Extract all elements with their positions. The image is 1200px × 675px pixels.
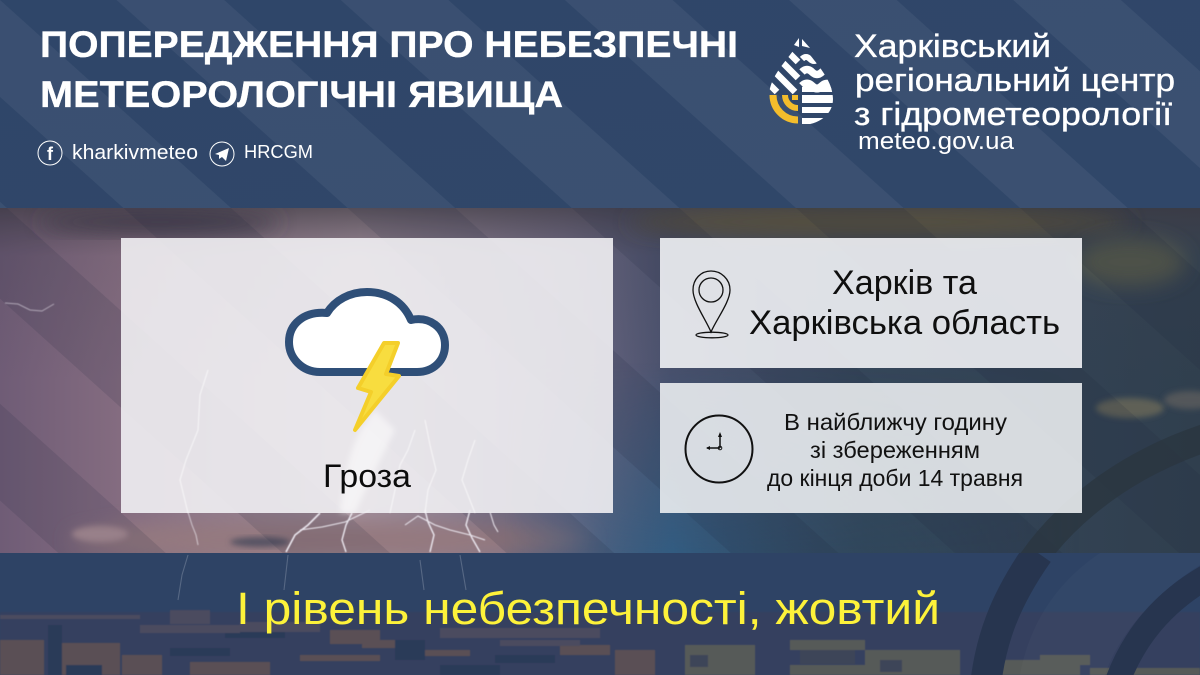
facebook handle: kharkivmeteo [72, 142, 198, 164]
title: ПОПЕРЕДЖЕННЯ ПРО НЕБЕЗПЕЧНІ [40, 24, 738, 65]
location text: Харків та [832, 264, 977, 302]
background photo: storm sky with lightning [0, 206, 1200, 560]
icon: telegram [210, 142, 234, 166]
danger level: І рівень небезпечності, жовтий [236, 583, 940, 634]
panel: location [660, 238, 1082, 368]
icon: clock [686, 416, 752, 482]
lower-right arcs [1021, 425, 1200, 553]
title: МЕТЕОРОЛОГІЧНІ ЯВИЩА [40, 74, 563, 115]
icon: cloud with lightning [289, 292, 445, 430]
panel: time [660, 383, 1082, 513]
time text: зі збереженням [810, 437, 980, 463]
location text: Харківська область [749, 304, 1060, 342]
icon: facebook: f [47, 144, 54, 164]
telegram handle: HRCGM [244, 142, 313, 162]
organisation name: регіональний центр [855, 62, 1175, 98]
time text [767, 409, 1023, 491]
title [40, 24, 738, 115]
logo: water drop [770, 38, 833, 124]
organisation name: з гідрометеорології [854, 96, 1172, 132]
time text: В найближчу годину [784, 409, 1008, 435]
label: hazard: Гроза [323, 458, 411, 494]
icon: facebook [38, 141, 62, 165]
website: meteo.gov.ua [858, 128, 1015, 155]
bottom band with city skyline [0, 553, 1200, 675]
header band [0, 0, 1200, 208]
icon: map pin [693, 271, 730, 338]
faded city skyline [0, 610, 1200, 675]
organisation name [854, 28, 1175, 132]
panel: hazard type [121, 238, 613, 513]
location text [749, 264, 1060, 342]
organisation name: Харківський [854, 28, 1051, 64]
social handles [38, 141, 313, 166]
faint lightning in panel [180, 370, 475, 513]
time text: до кінця доби 14 травня [767, 465, 1023, 491]
